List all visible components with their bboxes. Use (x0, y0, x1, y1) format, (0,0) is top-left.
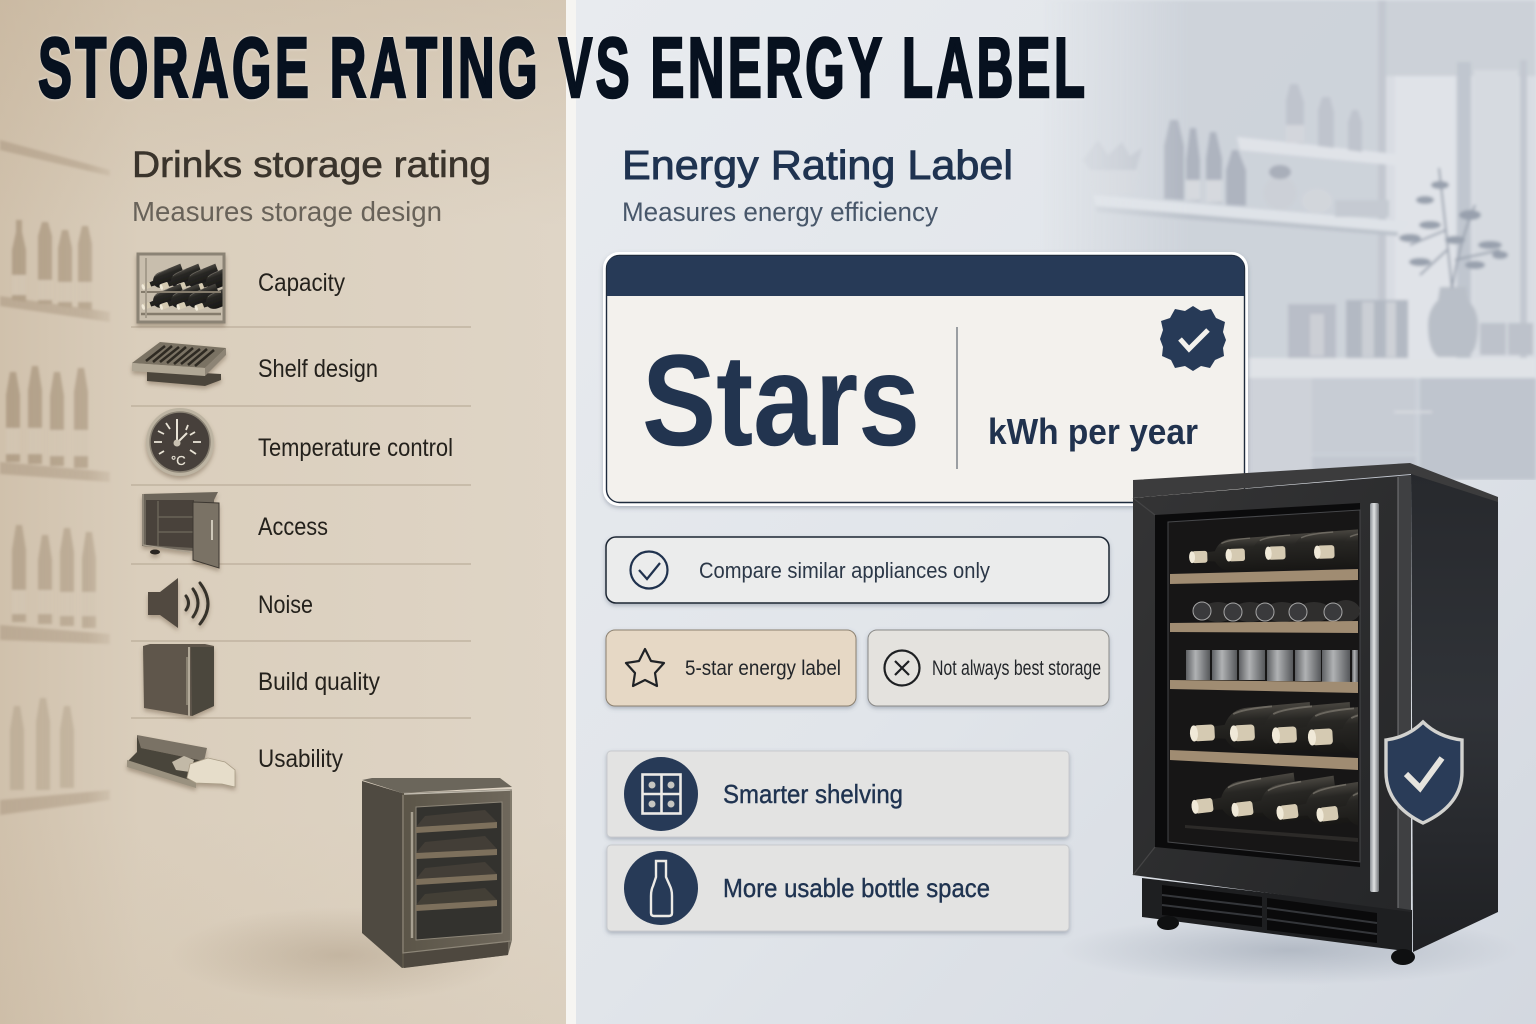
item: capacity (138, 254, 345, 322)
text: not always best storage: Not always best storage (932, 657, 1101, 680)
bottle row 5 (1192, 772, 1358, 822)
bottle row 4 (1190, 702, 1358, 746)
icon: open door cabinet (142, 492, 219, 568)
fridge plinth (1142, 878, 1494, 965)
chip: not always best storage (868, 630, 1109, 706)
item: usability (127, 735, 343, 788)
illustration: large black wine fridge (1133, 463, 1498, 965)
fridge side (1411, 473, 1498, 952)
icon: hand pulling tray (127, 735, 235, 788)
text: compare note: Compare similar appliances only (699, 558, 990, 583)
icon: speaker (148, 578, 208, 628)
title: STORAGE RATING VS ENERGY LABEL (38, 21, 1085, 115)
subheading: measures energy efficiency: Measures energy efficiency (622, 197, 938, 227)
label: noise: Noise (258, 591, 313, 619)
subheading: measures storage design: Measures storage design (132, 196, 442, 227)
can row (1186, 650, 1358, 682)
text: kwh per year: kWh per year (988, 411, 1198, 452)
shelf 1 (1170, 569, 1358, 584)
fridge top (1133, 463, 1498, 502)
label: usability: Usability (258, 745, 343, 773)
shelf 3 (1170, 680, 1358, 693)
background: blurred kitchen scene (1040, 0, 1536, 486)
chip: 5-star energy label (606, 630, 856, 706)
text: smarter shelving: Smarter shelving (723, 779, 903, 809)
illustration: small beverage fridge (362, 778, 512, 968)
fridge glass interior (1155, 503, 1360, 867)
item: access (142, 492, 328, 568)
heading: energy rating label: Energy Rating Label (622, 142, 1013, 188)
text: more usable bottle space: More usable bottle space (723, 873, 990, 903)
chip: compare similar appliances only (606, 537, 1109, 603)
bottle row 2 (1193, 600, 1360, 622)
card: more usable bottle space (607, 845, 1069, 931)
fridge handle (1370, 503, 1379, 892)
icon: bottle (624, 851, 698, 925)
bottle row 1 (1189, 529, 1358, 564)
item: temperature control (146, 408, 453, 476)
icon: temperature dial: °C (171, 453, 186, 468)
fridge floor shadow (170, 907, 510, 1003)
icon: shield check (1386, 722, 1462, 823)
fridge door frame (1133, 475, 1411, 912)
shelf 2 (1170, 621, 1358, 633)
list: storage rating factors (127, 254, 471, 788)
label: access: Access (258, 513, 328, 541)
item: build quality (143, 644, 380, 716)
background: blurred bottle shelves (0, 140, 110, 815)
icon: temperature dial (146, 408, 214, 476)
card: energy rating label (603, 252, 1248, 506)
panel: energy label background (856, 0, 1536, 1024)
icon: check circle (630, 552, 668, 588)
text: 5-star label: 5-star energy label (685, 657, 841, 680)
text: stars: Stars (642, 327, 920, 473)
icon: star (626, 649, 664, 686)
item: noise (148, 578, 313, 628)
label: shelf design: Shelf design (258, 355, 378, 383)
icon: slatted shelf (132, 342, 226, 386)
icon: verified badge (1160, 306, 1226, 371)
item: shelf design (132, 342, 378, 386)
label: build quality: Build quality (258, 668, 380, 696)
label: temperature control: Temperature control (258, 434, 453, 462)
label: capacity: Capacity (258, 269, 345, 297)
fridge floor shadow (1060, 915, 1520, 985)
icon: cross circle (884, 650, 920, 686)
panel: storage rating background (0, 0, 576, 1024)
card: smarter shelving (607, 751, 1069, 837)
shelf 4 (1170, 750, 1358, 770)
icon: bottle rack (138, 254, 239, 322)
heading: drinks storage rating: Drinks storage rating (132, 144, 491, 185)
icon: shelving grid (624, 757, 698, 831)
icon: solid cabinet (143, 644, 214, 716)
